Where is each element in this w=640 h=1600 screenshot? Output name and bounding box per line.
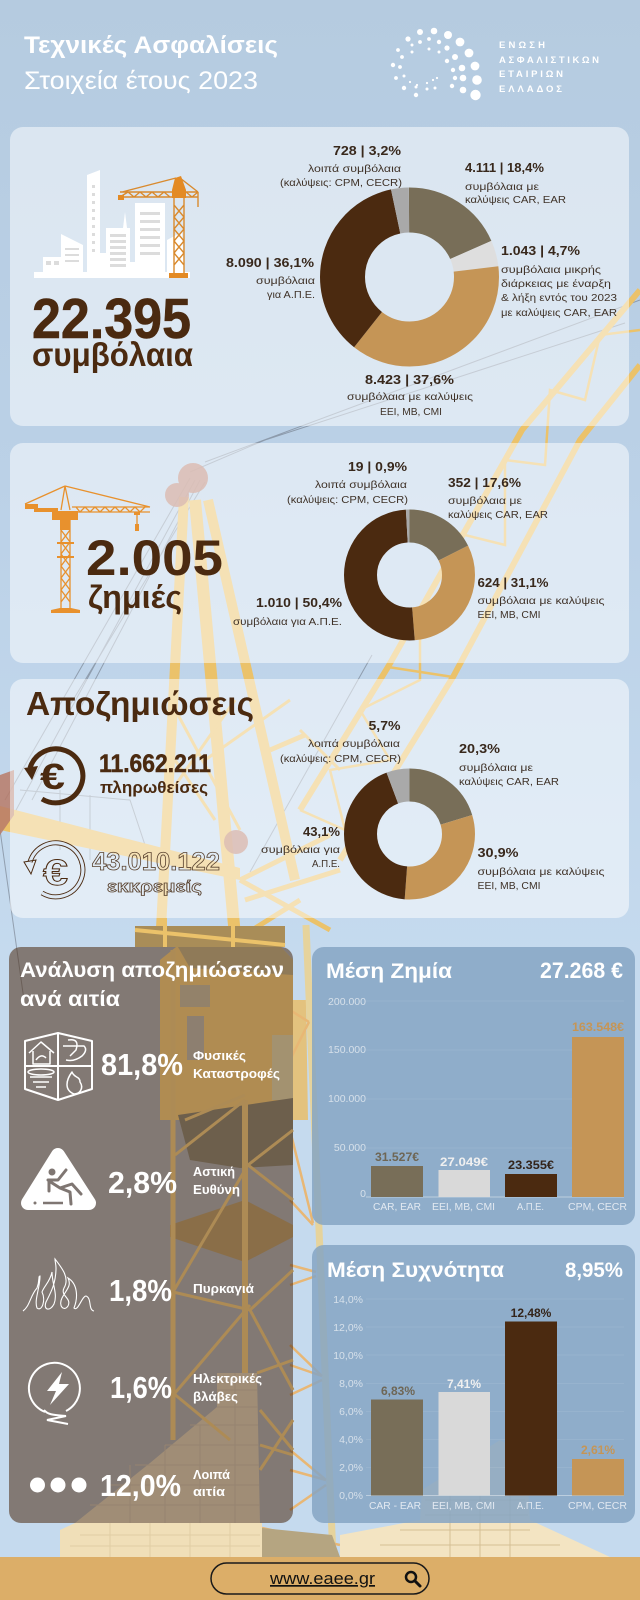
heading: average frequency: Μέση Συχνότητα — [327, 1259, 504, 1282]
label: EEI MB CMI compensation: 30,9% — [478, 845, 519, 860]
stat: natural disasters: Καταστροφές — [193, 1067, 280, 1081]
label: renewable compensation: Α.Π.Ε. — [312, 858, 340, 870]
label: CAR EAR claims — [448, 475, 548, 521]
icon: magnifier — [406, 1572, 420, 1586]
stat: other causes — [100, 1468, 230, 1503]
stat: paid amount: πληρωθείσες — [100, 778, 208, 797]
label: other contracts: 728 | 3,2% — [333, 143, 401, 158]
bar chart: average claim: 200.000 — [328, 996, 366, 1008]
bar chart: average frequency: 7,41% — [447, 1377, 481, 1391]
icon: outstanding euro — [24, 843, 83, 897]
stat: other causes: Λοιπά — [193, 1468, 230, 1482]
panel: analysis by cause — [9, 947, 293, 1523]
bar chart: average claim: 150.000 — [328, 1044, 366, 1056]
stat: outstanding amount — [92, 848, 220, 896]
photo seen through the panel: tower and chimney — [75, 947, 293, 1523]
label: other claims — [287, 459, 408, 506]
label: other compensation — [280, 718, 401, 765]
bar chart: average frequency: 12,48% — [511, 1306, 552, 1320]
label: EEI MB CMI compensation — [478, 845, 604, 892]
bar chart: average claim: 163.548€ — [572, 1020, 624, 1034]
label: CAR EAR compensation: 20,3% — [459, 741, 500, 756]
icon: natural disasters — [25, 1033, 92, 1100]
heading: analysis by cause — [20, 959, 284, 1011]
donut chart: compensation — [360, 785, 458, 883]
icon: fire — [23, 1259, 94, 1311]
heading: analysis by cause: Ανάλυση αποζημιώσεων — [20, 959, 284, 982]
bar chart: average claim — [328, 996, 627, 1213]
donut chart: claims — [360, 526, 458, 624]
stat: civil liability: 2,8% — [108, 1165, 177, 1200]
label: other contracts: λοιπά συμβόλαια — [308, 163, 401, 175]
label: EEI MB CMI contracts: 8.423 | 37,6% — [365, 372, 454, 387]
donut chart: contracts — [342, 210, 476, 344]
bar chart: average claim: 0 — [360, 1188, 366, 1200]
label: CAR EAR contracts: 4.111 | 18,4% — [465, 160, 544, 175]
stat: civil liability: Αστική — [193, 1165, 235, 1179]
label: EEI MB CMI compensation: EEI, MB, CMI — [478, 880, 540, 892]
stat: outstanding amount: 43.010.122 — [92, 848, 220, 876]
icon: liability warning — [28, 1155, 89, 1204]
label: renewable compensation: 43,1% — [303, 824, 340, 839]
icon: logo dots — [391, 28, 482, 100]
label: other contracts — [280, 143, 402, 189]
icon: paid euro: € — [40, 756, 65, 797]
label: CAR EAR contracts: συμβόλαια με — [465, 181, 539, 193]
title: Τεχνικές Ασφαλίσεις — [24, 32, 278, 59]
big number: 2.005 claims: 2.005 — [86, 530, 223, 586]
bar chart: average frequency: 2,61% — [581, 1443, 615, 1457]
stat: electrical faults — [110, 1370, 262, 1405]
bar chart: average frequency: 8,0% — [339, 1378, 363, 1390]
label: short-term contracts: 1.043 | 4,7% — [501, 243, 580, 258]
label: EEI MB CMI claims: EEI, MB, CMI — [478, 609, 540, 621]
stat: paid amount — [99, 750, 211, 797]
heading: average claim: Μέση Ζημία — [326, 960, 452, 983]
label: CAR EAR claims: 352 | 17,6% — [448, 475, 521, 490]
label: renewable claims: συμβόλαια για Α.Π.Ε. — [233, 616, 342, 628]
bar chart: average frequency: 6,0% — [339, 1406, 363, 1418]
label: EEI MB CMI contracts: συμβόλαια με καλύψεις — [347, 391, 473, 403]
big number: 22.395 contracts: συμβόλαια — [32, 336, 193, 373]
bar chart: average claim: Α.Π.Ε. — [517, 1201, 544, 1213]
stat: natural disasters — [101, 1047, 280, 1082]
stat: fire: 1,8% — [109, 1273, 172, 1308]
title: Στοιχεία έτους 2023 — [24, 67, 258, 95]
stat: other causes: 12,0% — [100, 1468, 181, 1503]
website search pill — [211, 1563, 429, 1594]
label: other claims: (καλύψεις: CPM, CECR) — [287, 494, 408, 506]
icon: tower crane — [25, 486, 150, 613]
logo text: ΕΛΛΑΔΟΣ — [499, 84, 562, 95]
label: short-term contracts: με καλύψεις CAR, EAR — [501, 307, 617, 319]
bar chart: average claim: 27.049€ — [440, 1155, 488, 1169]
bar chart: average claim: CAR, EAR — [373, 1201, 421, 1213]
label: short-term contracts: διάρκειας με έναρξη — [501, 278, 611, 290]
big number: 22.395 contracts: 22.395 — [32, 287, 191, 351]
label: renewable claims — [233, 595, 342, 628]
panel: average frequency — [312, 1245, 635, 1523]
stat: natural disasters: Φυσικές — [193, 1049, 246, 1063]
bar chart: average claim: CPM, CECR — [568, 1201, 627, 1213]
icon: electrical fault — [29, 1363, 80, 1424]
bar chart: average claim: 31.527€ — [375, 1150, 419, 1164]
icon: paid euro — [24, 749, 83, 803]
label: other compensation: λοιπά συμβόλαια — [308, 738, 400, 750]
big number: 2.005 claims: ζημιές — [88, 579, 182, 615]
website address: www.eaee.gr — [269, 1569, 375, 1588]
bar chart: average claim: EEI, MB, CMI — [432, 1201, 495, 1213]
label: short-term contracts: & λήξη εντός του 2023 — [501, 292, 617, 304]
label: other claims: 19 | 0,9% — [348, 459, 407, 474]
bar chart: average frequency: 12,0% — [333, 1322, 363, 1334]
label: EEI MB CMI contracts — [347, 372, 473, 418]
bar chart: average frequency — [333, 1294, 627, 1512]
icon: city skyline with crane — [34, 170, 198, 278]
label: short-term contracts — [501, 243, 617, 319]
icon: outstanding euro: € — [43, 852, 68, 893]
stat: outstanding amount: εκκρεμείς — [107, 877, 202, 896]
label: EEI MB CMI contracts: EEI, MB, CMI — [380, 406, 442, 418]
label: CAR EAR contracts: καλύψεις CAR, EAR — [465, 194, 566, 206]
label: CAR EAR claims: συμβόλαια με — [448, 495, 522, 507]
label: renewable compensation — [261, 824, 340, 870]
bar chart: average frequency: Α.Π.Ε. — [517, 1500, 544, 1512]
label: CAR EAR contracts — [465, 160, 566, 206]
label: renewable compensation: συμβόλαια για — [261, 844, 340, 856]
label: other compensation: 5,7% — [368, 718, 401, 733]
bar chart: average frequency: 14,0% — [333, 1294, 363, 1306]
stat: civil liability: Ευθύνη — [193, 1183, 240, 1197]
logo text — [499, 40, 599, 95]
heading: average frequency: 8,95% — [565, 1259, 623, 1282]
label: EEI MB CMI compensation: συμβόλαια με καλύψεις — [478, 866, 604, 878]
logo text: ΕΤΑΙΡΙΩΝ — [499, 69, 563, 80]
heading: average claim: 27.268 € — [540, 958, 623, 983]
logo — [391, 28, 599, 100]
stat: fire — [109, 1273, 254, 1308]
bar chart: average claim: 100.000 — [328, 1093, 366, 1105]
bar chart: average frequency: 2,0% — [339, 1462, 363, 1474]
label: renewable contracts: για Α.Π.Ε. — [267, 289, 315, 301]
label: short-term contracts: συμβόλαια μικρής — [501, 264, 601, 276]
label: renewable claims: 1.010 | 50,4% — [256, 595, 342, 610]
panel: claims — [10, 443, 629, 663]
bar chart: average frequency: 0,0% — [339, 1490, 363, 1502]
label: CAR EAR compensation: συμβόλαια με — [459, 762, 533, 774]
icon: three dots — [30, 1478, 86, 1492]
label: CAR EAR claims: καλύψεις CAR, EAR — [448, 509, 548, 521]
panel: compensation — [10, 679, 629, 918]
label: other compensation: (καλύψεις: CPM, CECR) — [280, 753, 401, 765]
title — [24, 32, 278, 95]
panel: average claim — [312, 947, 635, 1225]
stat: electrical faults: Ηλεκτρικές — [193, 1372, 262, 1386]
label: EEI MB CMI claims: 624 | 31,1% — [478, 575, 549, 590]
label: EEI MB CMI claims: συμβόλαια με καλύψεις — [478, 595, 604, 607]
big number: 2.005 claims — [86, 530, 223, 615]
label: CAR EAR compensation — [459, 741, 559, 788]
bar chart: average frequency: CAR - EAR — [369, 1500, 421, 1512]
stat: natural disasters: 81,8% — [101, 1047, 183, 1082]
label: EEI MB CMI claims — [478, 575, 604, 621]
bar chart: average claim: 23.355€ — [508, 1158, 554, 1172]
panel: contracts — [10, 127, 629, 426]
stat: electrical faults: βλάβες — [193, 1390, 238, 1404]
label: CAR EAR compensation: καλύψεις CAR, EAR — [459, 776, 559, 788]
bar chart: average frequency: EEI, MB, CMI — [432, 1500, 495, 1512]
label: other claims: λοιπά συμβόλαια — [315, 479, 407, 491]
stat: fire: Πυρκαγιά — [193, 1282, 254, 1296]
bar chart: average claim: 50.000 — [334, 1142, 366, 1154]
bar chart: average frequency: 6,83% — [381, 1384, 415, 1398]
label: renewable contracts: 8.090 | 36,1% — [226, 255, 314, 270]
stat: paid amount: 11.662.211 — [99, 750, 211, 778]
heading: compensation: Αποζημιώσεις — [26, 685, 254, 722]
bar chart: average frequency: 4,0% — [339, 1434, 363, 1446]
label: renewable contracts — [226, 255, 315, 301]
stat: other causes: αιτία — [193, 1485, 225, 1499]
heading: average claim — [326, 958, 623, 983]
logo text: ΑΣΦΑΛΙΣΤΙΚΩΝ — [499, 55, 599, 66]
stat: electrical faults: 1,6% — [110, 1370, 172, 1405]
label: renewable contracts: συμβόλαια — [256, 275, 315, 287]
label: other contracts: (καλύψεις: CPM, CECR) — [280, 177, 402, 189]
heading: average frequency — [327, 1259, 623, 1282]
footer bar — [0, 1557, 640, 1600]
logo text: ΕΝΩΣΗ — [499, 40, 545, 51]
stat: civil liability — [108, 1165, 240, 1200]
bar chart: average frequency: 10,0% — [333, 1350, 363, 1362]
bar chart: average frequency: CPM, CECR — [568, 1500, 627, 1512]
heading: analysis by cause: ανά αιτία — [20, 988, 120, 1011]
